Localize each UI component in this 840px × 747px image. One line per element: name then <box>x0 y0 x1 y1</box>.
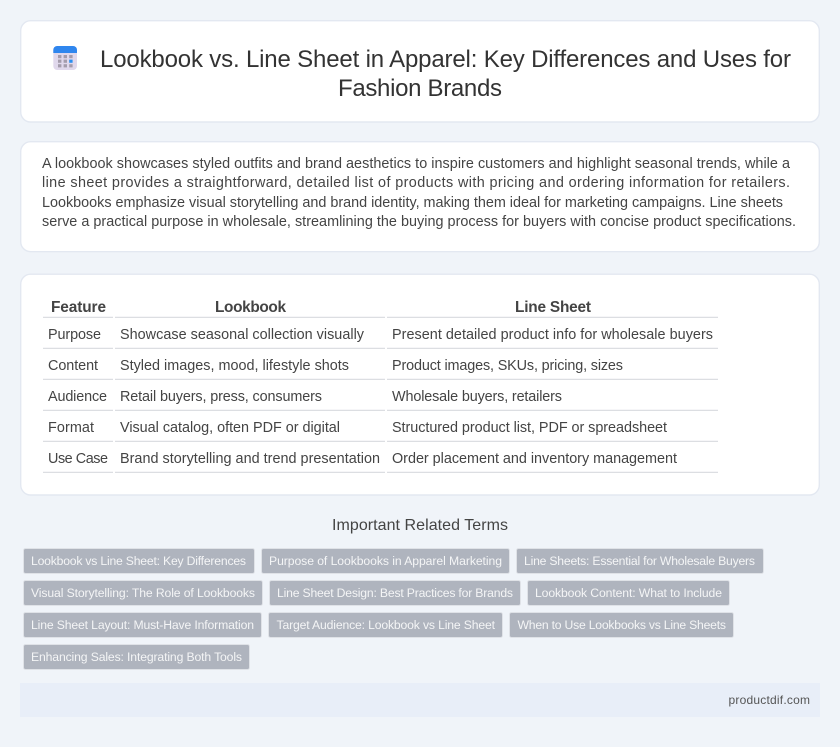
panel: summary <box>21 142 819 252</box>
tag: Visual Storytelling: The Role of Lookbooks <box>31 586 255 600</box>
tag <box>24 612 262 638</box>
tag <box>268 612 502 638</box>
row: content: Styled images, mood, lifestyle shots <box>120 358 349 374</box>
summary text: Lookbooks emphasize visual storytelling and brand identity, making them ideal for marketing campaigns. Line sheets <box>42 195 783 211</box>
title: Lookbook vs. Line Sheet in Apparel: Key Differences and Uses for <box>100 46 791 73</box>
row: content <box>48 358 623 374</box>
heading: related terms: Important Related Terms <box>332 517 508 534</box>
tag <box>24 644 250 670</box>
tag: When to Use Lookbooks vs Line Sheets <box>518 618 726 632</box>
table header <box>51 299 591 316</box>
tag <box>516 548 764 574</box>
icon: calendar <box>53 46 77 70</box>
title <box>100 46 791 102</box>
summary text: line sheet provides a straightforward, detailed list of products with pricing and ordering information for retailers. <box>42 175 790 191</box>
row: purpose: Purpose <box>48 327 101 343</box>
row: content: Product images, SKUs, pricing, sizes <box>392 358 623 374</box>
tag <box>24 548 254 574</box>
row: format: Format <box>48 420 94 436</box>
row: format: Structured product list, PDF or spreadsheet <box>392 420 667 436</box>
table header: Feature <box>51 299 106 316</box>
tag <box>270 580 520 606</box>
row: purpose: Present detailed product info for wholesale buyers <box>392 327 713 343</box>
tag: Line Sheets: Essential for Wholesale Buyers <box>524 554 755 568</box>
row: format: Visual catalog, often PDF or digital <box>120 420 340 436</box>
row: use case <box>48 451 677 467</box>
row: use case: Brand storytelling and trend presentation <box>120 451 380 467</box>
row: purpose <box>48 327 713 343</box>
tag: Line Sheet Design: Best Practices for Brands <box>277 586 513 600</box>
title: Fashion Brands <box>338 75 502 102</box>
footer text: productdif.com <box>728 693 810 707</box>
tag: Line Sheet Layout: Must-Have Information <box>31 618 254 632</box>
panel: comparison table <box>21 274 819 495</box>
related term tags <box>24 548 764 670</box>
row: content: Content <box>48 358 98 374</box>
footer bar <box>20 683 820 717</box>
row: audience: Audience <box>48 389 107 405</box>
tag <box>262 548 510 574</box>
summary text: serve a practical purpose in wholesale, streamlining the buying process for buyers with concise product specifications. <box>42 214 796 230</box>
row: format <box>48 420 667 436</box>
tag <box>528 580 730 606</box>
row: audience: Wholesale buyers, retailers <box>392 389 562 405</box>
row: audience: Retail buyers, press, consumers <box>120 389 322 405</box>
summary text <box>42 156 796 230</box>
tag: Purpose of Lookbooks in Apparel Marketing <box>269 554 502 568</box>
row: use case: Use Case <box>48 451 108 467</box>
tag: Target Audience: Lookbook vs Line Sheet <box>276 618 496 632</box>
row: purpose: Showcase seasonal collection visually <box>120 327 365 343</box>
tag <box>510 612 734 638</box>
summary text: A lookbook showcases styled outfits and brand aesthetics to inspire customers and highlight seasonal trends, while a <box>42 156 790 172</box>
tag: Lookbook vs Line Sheet: Key Differences <box>31 554 246 568</box>
table header: Lookbook <box>215 299 286 316</box>
tag: Enhancing Sales: Integrating Both Tools <box>31 650 242 664</box>
row: use case: Order placement and inventory management <box>392 451 677 467</box>
row: audience <box>48 389 562 405</box>
tag <box>24 580 262 606</box>
table header: Line Sheet <box>515 299 591 316</box>
tag: Lookbook Content: What to Include <box>535 586 722 600</box>
panel: title header <box>21 21 819 122</box>
